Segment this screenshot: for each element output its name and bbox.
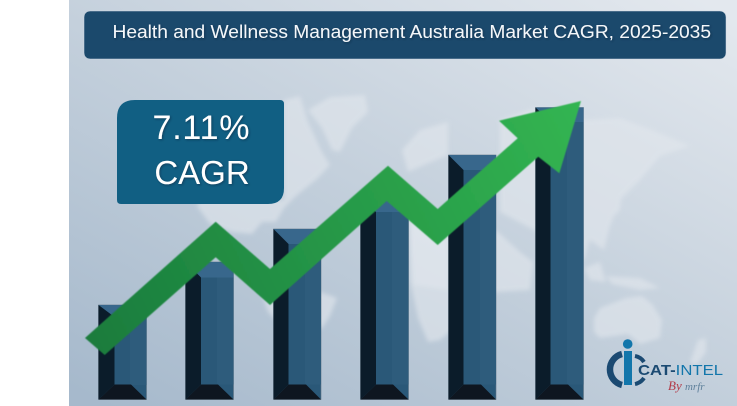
bar 2: [186, 262, 234, 400]
map: greenland: [308, 95, 368, 152]
map: asia: [500, 108, 690, 260]
logo mark: [610, 339, 644, 385]
map: japan: [604, 172, 622, 222]
map: africa and middle east: [409, 212, 533, 342]
CAGR value: 7.11%: [152, 109, 250, 147]
world map: [197, 95, 706, 366]
logo: CAT-INTEL by mrfr: [610, 339, 723, 393]
map: new zealand: [690, 338, 706, 366]
logo byline: By mrfr: [668, 378, 705, 393]
map: south america: [262, 290, 337, 330]
bar 5: [448, 155, 496, 400]
arrow: growth trend: [85, 101, 581, 355]
bar 3: [274, 229, 321, 400]
map: north america: [197, 96, 330, 234]
title: Health and Wellness Management Australia Market CAGR, 2025-2035: [112, 21, 711, 42]
callout: CAGR: [117, 100, 284, 204]
bar chart: [98, 108, 584, 400]
header banner: [84, 11, 726, 59]
map: australia: [594, 296, 662, 344]
logo wordmark: CAT- INTEL: [638, 362, 723, 379]
map: europe: [402, 122, 448, 172]
CAGR label: CAGR: [154, 154, 250, 191]
map: north africa highlight: [409, 212, 448, 290]
map: indonesia: [584, 262, 660, 290]
bar 4: [360, 197, 408, 400]
bar 1: [98, 305, 146, 400]
bar 6: [536, 108, 584, 400]
